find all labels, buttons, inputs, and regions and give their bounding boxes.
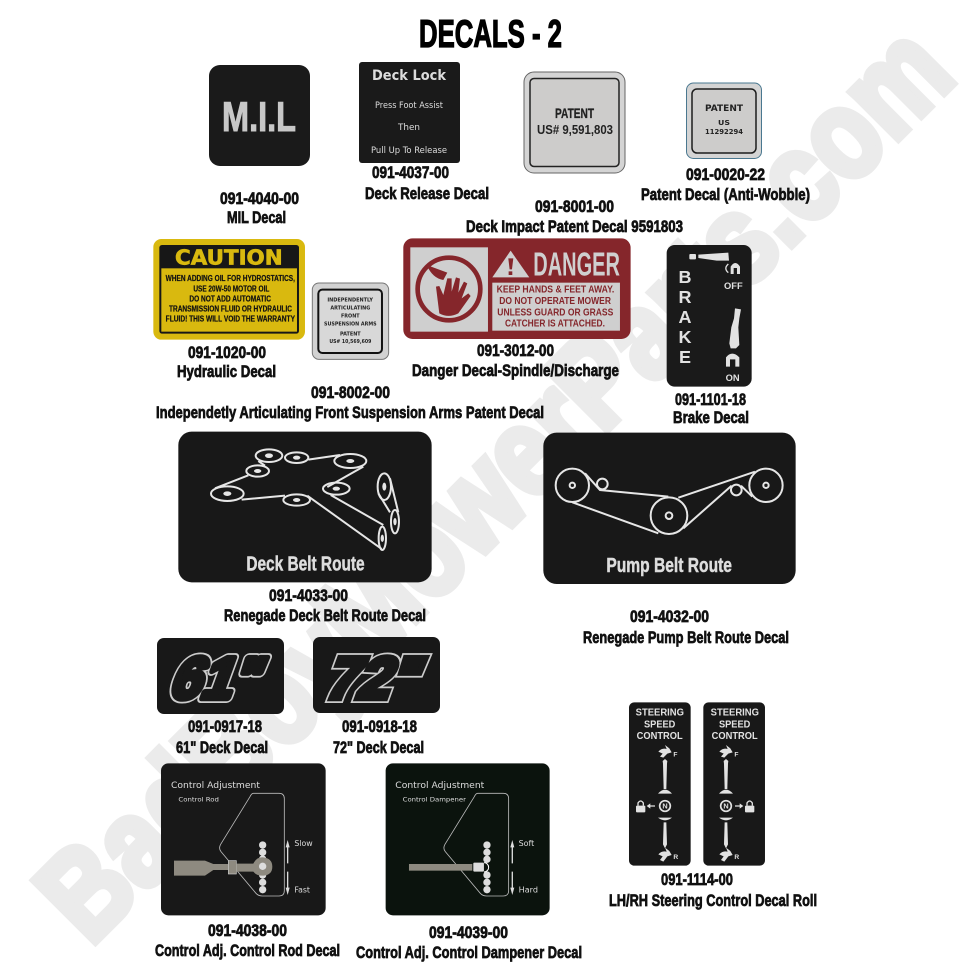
decal: Caution: CAUTION [175, 245, 283, 269]
decal: Caution: WHEN ADDING OIL FOR HYDROSTATICS, [166, 274, 295, 283]
decal: Pump Belt Route: Pump Belt Route [606, 554, 732, 577]
decal: Control Adjustment Dampener [386, 763, 550, 915]
label: Deck Release Decal: Deck Release Decal [365, 184, 489, 203]
label: Hydraulic Decal: 091-1020-00 [188, 343, 266, 362]
label: 72 Deck Decal: 72" Deck Decal [333, 738, 424, 757]
decal: Danger: UNLESS GUARD OR GRASS [497, 307, 614, 318]
decal: Control Adjustment Dampener: Hard [519, 886, 538, 895]
decal: Patent 9,591,803: US# 9,591,803 [537, 122, 613, 137]
decal: Control Adjustment Dampener: Soft [519, 839, 534, 848]
decal: Brake: K [678, 327, 691, 347]
decal: Patent 11292294 [686, 83, 762, 158]
label: Renegade Deck Belt Route Decal: 091-4033-00 [269, 586, 348, 605]
decal: Danger: DO NOT OPERATE MOWER [499, 296, 611, 307]
label: Patent Decal Anti-Wobble [641, 165, 810, 204]
label: Renegade Deck Belt Route Decal [224, 586, 426, 625]
decal: Brake [667, 245, 752, 387]
label: Control Rod Decal: Control Adj. Control Rod Decal [155, 941, 340, 960]
label: MIL Decal [220, 189, 299, 227]
label: Danger Decal [412, 341, 619, 380]
decal: Steering Speed Control LH: R [673, 854, 678, 861]
label: Deck Impact Patent Decal [466, 197, 683, 236]
label: 61 Deck Decal: 61" Deck Decal [176, 738, 268, 757]
decal: Brake: ON [726, 373, 740, 383]
decal: Independently Articulating Patent: US# 10,569,609 [329, 339, 372, 345]
label: Control Rod Decal [155, 921, 340, 960]
decal: Deck Lock: Press Foot Assist [375, 101, 443, 111]
label: Hydraulic Decal: Hydraulic Decal [177, 362, 276, 381]
label: Patent Decal Anti-Wobble: Patent Decal (Anti-Wobble) [641, 185, 810, 204]
decal: 61 inch: 61" [163, 646, 275, 711]
label: Steering Control Decal Roll: LH/RH Steering Control Decal Roll [609, 891, 817, 910]
decal: Patent 11292294: PATENT [705, 104, 743, 114]
label: Control Dampener Decal: 091-4039-00 [429, 923, 508, 942]
decal: Patent 9,591,803 [524, 72, 625, 173]
label: 72 Deck Decal: 091-0918-18 [342, 717, 417, 736]
decal: Deck Lock [359, 62, 460, 163]
decal: Independently Articulating Patent: INDEPENDENTLY [327, 298, 373, 304]
decal: Independently Articulating Patent: SUSPENSION ARMS [324, 322, 377, 328]
decal: Pump Belt Route [543, 433, 796, 584]
decal: Steering Speed Control RH: STEERING [711, 708, 759, 719]
decal: Steering Speed Control RH: N [723, 802, 729, 811]
decal: Steering Speed Control RH: R [734, 854, 739, 861]
decal: Steering Speed Control RH [703, 702, 765, 866]
decal: Independently Articulating Patent: PATENT [340, 331, 361, 337]
label: Danger Decal: 091-3012-00 [477, 341, 554, 360]
decal: Deck Lock: Deck Lock [372, 68, 447, 84]
label: MIL Decal: MIL Decal [227, 208, 286, 227]
label: Hydraulic Decal [177, 343, 276, 381]
decal: Caution: TRANSMISSION FLUID OR HYDRAULIC [169, 305, 292, 314]
decal: Caution: USE 20W-50 MOTOR OIL [193, 284, 269, 293]
decal: Caution [153, 239, 305, 340]
decal: Brake: B [678, 267, 691, 287]
decal: Brake: OFF [724, 281, 743, 291]
label: Brake Decal [673, 390, 749, 427]
decal: Brake: A [678, 307, 691, 327]
label: Renegade Pump Belt Route Decal [583, 607, 789, 647]
decal: Independently Articulating Patent: FRONT [341, 314, 360, 320]
label: Renegade Deck Belt Route Decal: Renegade Deck Belt Route Decal [224, 606, 426, 625]
label: Renegade Pump Belt Route Decal: Renegade Pump Belt Route Decal [583, 628, 789, 647]
decal: Steering Speed Control LH: CONTROL [637, 731, 683, 742]
label: Brake Decal: Brake Decal [673, 408, 749, 427]
decal: Independently Articulating Patent [312, 283, 389, 359]
decal: Control Adjustment Dampener: Control Dampener [403, 796, 466, 803]
decal: 61 inch: 61" [163, 646, 275, 711]
decal: Control Adjustment Dampener: Control Adjustment [395, 781, 485, 791]
decal: Steering Speed Control RH: CONTROL [712, 731, 758, 742]
decal: Danger: DANGER [533, 247, 620, 284]
label: Brake Decal: 091-1101-18 [675, 390, 746, 409]
label: Steering Control Decal Roll: 091-1114-00 [661, 870, 733, 889]
decal: Control Adjustment Rod: Control Adjustment [171, 781, 260, 791]
decal: Control Adjustment Rod: Control Rod [178, 796, 219, 803]
label: Deck Release Decal: 091-4037-00 [372, 163, 449, 182]
decal: Caution: DO NOT ADD AUTOMATIC [189, 294, 271, 303]
decal: Steering Speed Control LH: STEERING [636, 708, 684, 719]
decal: Independently Articulating Patent: ARTICULATING [330, 306, 370, 312]
decal: Danger: KEEP HANDS & FEET AWAY. [497, 285, 614, 296]
label: Control Dampener Decal: Control Adj. Control Dampener Decal [356, 943, 582, 962]
label: Danger Decal: Danger Decal-Spindle/Discharge [412, 361, 619, 380]
decal: MIL: M.I.L [222, 93, 296, 140]
label: Renegade Pump Belt Route Decal: 091-4032-00 [630, 607, 709, 626]
decal: Steering Speed Control LH: F [673, 751, 677, 758]
label: Independently Articulating Patent Decal: Independetly Articulating Front Suspension Arms Patent Decal [156, 403, 544, 422]
decal: Danger: CATCHER IS ATTACHED. [505, 319, 605, 330]
decal: Steering Speed Control RH: SPEED [719, 719, 751, 730]
label: Independently Articulating Patent Decal: 091-8002-00 [311, 383, 390, 402]
label: Control Dampener Decal [356, 923, 582, 962]
decal: Brake: E [679, 347, 691, 367]
title: DECALS - 2 [419, 13, 562, 56]
decal: 72 inch: 72" [318, 646, 434, 711]
label: 72 Deck Decal [333, 717, 424, 757]
label: Steering Control Decal Roll [609, 870, 817, 910]
decal: Control Adjustment Rod [161, 763, 326, 915]
label: Deck Impact Patent Decal: 091-8001-00 [535, 197, 614, 216]
decal: Steering Speed Control LH: SPEED [644, 719, 676, 730]
decal: Deck Lock: Then [397, 123, 420, 133]
label: MIL Decal: 091-4040-00 [220, 189, 299, 208]
label: Deck Impact Patent Decal: Deck Impact Patent Decal 9591803 [466, 217, 683, 236]
decal: Caution: FLUID! THIS WILL VOID THE WARRANTY [166, 315, 296, 324]
label: Deck Release Decal [365, 163, 489, 203]
decal: Control Adjustment Rod: Slow [294, 839, 313, 848]
decal: Brake: R [678, 287, 691, 307]
decal: Control Adjustment Rod: Fast [294, 886, 310, 895]
decal: Steering Speed Control RH: F [734, 751, 738, 758]
decal: 72 inch: 72" [318, 646, 434, 711]
decal: Deck Lock: Pull Up To Release [371, 146, 447, 156]
decal: Deck Belt Route: Deck Belt Route [246, 553, 365, 576]
label: Control Rod Decal: 091-4038-00 [208, 921, 287, 940]
decal: Steering Speed Control LH [629, 702, 691, 866]
label: 61 Deck Decal [176, 717, 268, 757]
label: Independently Articulating Patent Decal [156, 383, 544, 422]
decal: Steering Speed Control LH: N [662, 802, 668, 811]
decal: Danger [403, 238, 631, 339]
decal: MIL [209, 65, 310, 166]
decal: Patent 11292294: US [718, 119, 730, 127]
label: Patent Decal Anti-Wobble: 091-0020-22 [686, 165, 765, 184]
decal: Deck Belt Route [178, 432, 432, 582]
decal: Patent 9,591,803: PATENT [555, 105, 594, 121]
label: 61 Deck Decal: 091-0917-18 [188, 717, 262, 736]
decal: Patent 11292294: 11292294 [705, 128, 743, 136]
